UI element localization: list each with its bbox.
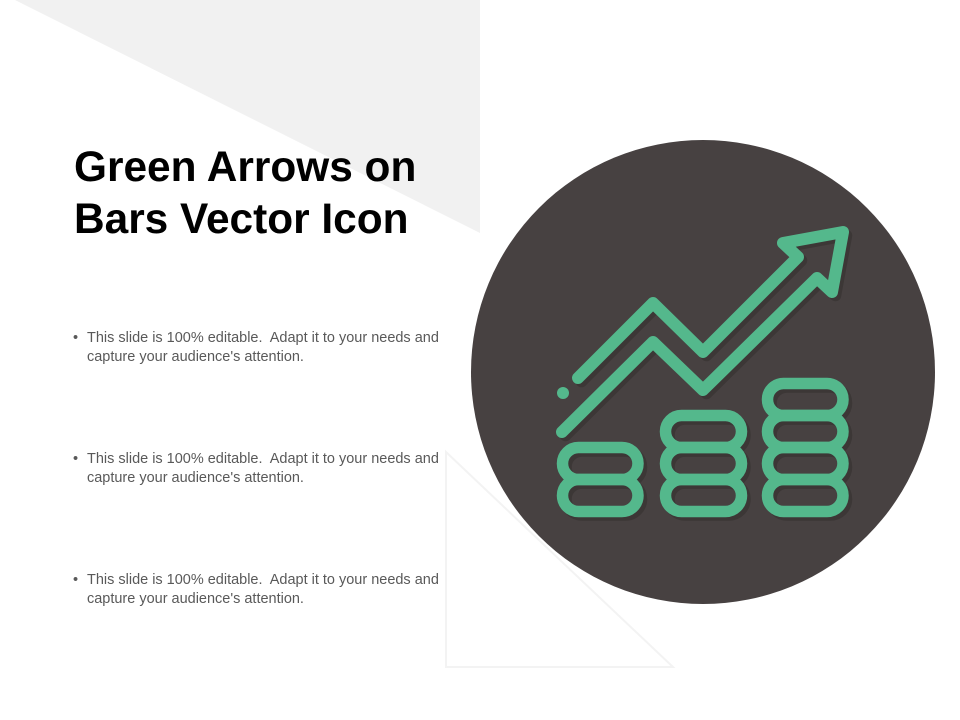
text block 3: This slide is 100% editable. Adapt it to your needs and capture your audience's attention.	[87, 572, 439, 606]
icon: coin stack 3	[768, 384, 843, 512]
icon: coin stack 1	[562, 448, 638, 512]
background grey triangle	[15, 0, 480, 233]
title: Bars Vector Icon	[74, 195, 409, 242]
text block 2: •	[73, 451, 78, 467]
title: Green Arrows on	[74, 143, 416, 190]
title	[74, 143, 416, 242]
icon: green zigzag arrow	[562, 232, 843, 432]
background outlined triangle	[446, 452, 673, 667]
text block 1: This slide is 100% editable. Adapt it to your needs and capture your audience's attention.	[87, 330, 439, 364]
text block 3: •	[73, 572, 78, 588]
text block 1: •	[73, 330, 78, 346]
icon: coin stack 2	[666, 416, 742, 512]
dark circle	[471, 140, 935, 604]
icon: arrow and coin stacks shadow	[566, 236, 846, 515]
icon: dot	[557, 387, 569, 399]
text block 2: This slide is 100% editable. Adapt it to your needs and capture your audience's attention.	[87, 451, 439, 486]
